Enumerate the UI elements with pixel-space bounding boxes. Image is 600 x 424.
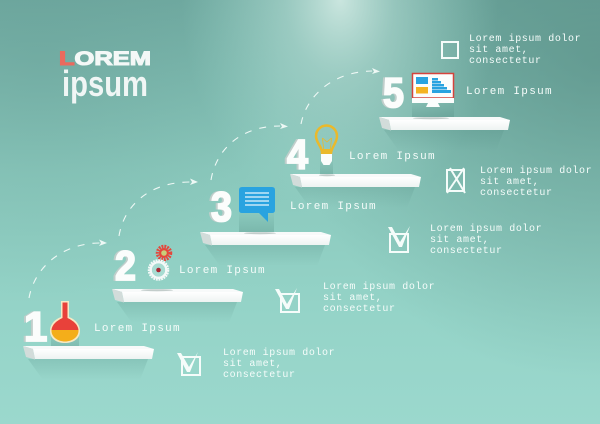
step label 4: Lorem Ipsum [349, 151, 436, 163]
description 2: consectetur [323, 304, 396, 315]
description 2: sit amet, [323, 292, 382, 304]
description 5 [469, 33, 581, 67]
icon: light bulb [316, 126, 337, 174]
description 5: Lorem ipsum dolor [469, 33, 581, 45]
description 3 [430, 223, 542, 257]
number 3: 3 [211, 183, 232, 230]
checkbox 1 [177, 352, 200, 375]
shelf 1 [23, 346, 154, 380]
description 3: sit amet, [430, 234, 489, 246]
description 1: sit amet, [223, 358, 282, 370]
checkbox 4 [447, 168, 465, 193]
number 2: 2 [115, 242, 136, 289]
number 3: 3 [209, 183, 230, 230]
number 4: 4 [285, 131, 307, 178]
description 1 [223, 347, 335, 381]
description 4: consectetur [480, 188, 553, 199]
icon: flask [50, 301, 80, 346]
checkbox 3 [388, 226, 410, 252]
shelf 3 [200, 232, 331, 266]
icon: monitor [412, 74, 454, 117]
description 1: Lorem ipsum dolor [223, 347, 335, 359]
description 5: consectetur [469, 56, 542, 67]
step label 3: Lorem Ipsum [290, 201, 377, 213]
shelf 5 [379, 117, 510, 151]
checkbox 5 [442, 42, 458, 58]
description 4: Lorem ipsum dolor [480, 165, 592, 177]
step label 2: Lorem Ipsum [179, 265, 266, 277]
number 1: 1 [24, 303, 47, 350]
description 5: sit amet, [469, 44, 528, 56]
description 3: Lorem ipsum dolor [430, 223, 542, 235]
number 4: 4 [287, 131, 309, 178]
title: LOREM [59, 49, 151, 70]
number 5: 5 [381, 69, 402, 116]
description 2: Lorem ipsum dolor [323, 281, 435, 293]
description 2 [323, 281, 435, 315]
title [59, 49, 151, 104]
checkbox 2 [275, 288, 299, 312]
icon: speech bubble [239, 187, 275, 232]
shelf 4 [290, 174, 421, 208]
number 1: 1 [22, 303, 45, 350]
title: ipsum [62, 63, 148, 104]
number 5: 5 [383, 69, 404, 116]
number 2: 2 [113, 242, 134, 289]
description 4 [480, 165, 592, 199]
description 3: consectetur [430, 246, 503, 257]
step label 5: Lorem Ipsum [466, 86, 553, 98]
dashed arrows between steps [29, 68, 380, 298]
shelf 2 [112, 289, 243, 323]
description 4: sit amet, [480, 176, 539, 188]
icon: gears [149, 246, 170, 280]
step label 1: Lorem Ipsum [94, 323, 181, 335]
description 1: consectetur [223, 370, 296, 381]
